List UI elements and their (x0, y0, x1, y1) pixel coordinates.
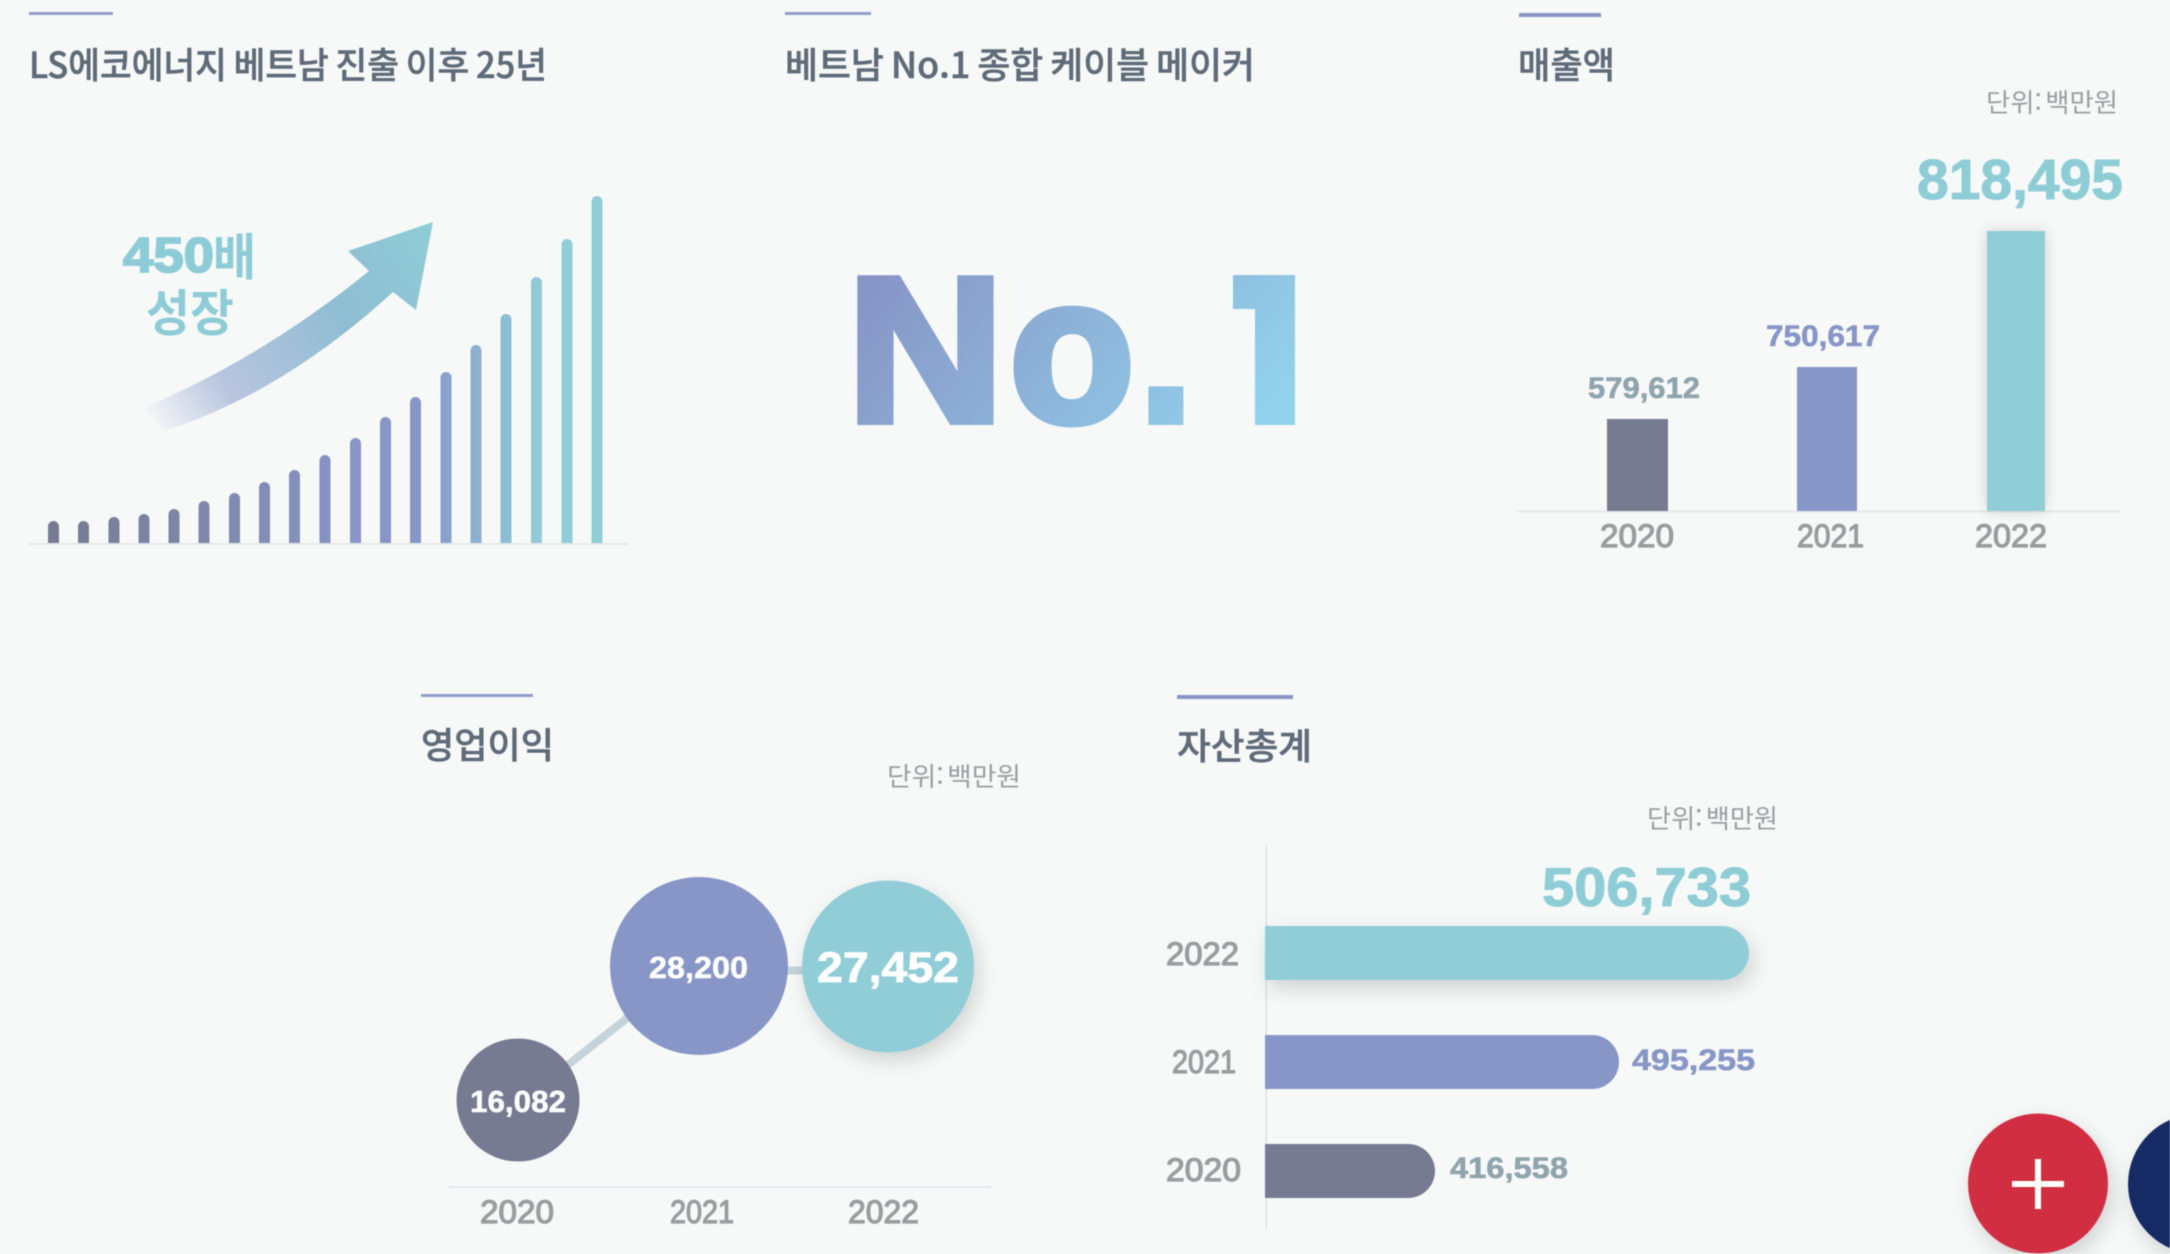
bubble chart: operating profit: 16,082 (470, 1084, 566, 1119)
bar chart: total assets: 2022 (1166, 936, 1239, 972)
bar chart: sales: 579,612 (1588, 372, 1700, 405)
panel: total assets (1166, 695, 1778, 1228)
bar chart: total assets: 495,255 (1632, 1044, 1755, 1077)
bar chart: total assets: 2020 (1166, 1152, 1241, 1188)
bar chart: growth bars (48, 196, 602, 555)
callout: 450x growth: 450 (123, 229, 214, 283)
unit label: 단위: 백만원 (1647, 799, 1778, 836)
unit label: 단위: 백만원 (1986, 83, 2118, 120)
big text: No. 1: o (1010, 235, 1134, 465)
bubble chart: operating profit: 2022 (848, 1194, 919, 1230)
bubble chart: operating profit (449, 877, 991, 1230)
bar chart: sales (1517, 148, 2123, 554)
big text: No. 1: 1 (1206, 235, 1321, 465)
panel: 25 years growth (29, 12, 629, 555)
big text: No. 1: . (1139, 235, 1193, 465)
callout: 450x growth (123, 218, 256, 346)
bubble chart: operating profit: 2021 (670, 1194, 734, 1230)
heading: growth: LS에코에너지 베트남 진출 이후 25년 (29, 37, 547, 89)
bubble chart: operating profit: 27,452 (817, 944, 959, 992)
bar chart: total assets: 506,733 (1542, 856, 1751, 918)
callout: 450x growth: 성장 (146, 274, 234, 346)
panel: operating profit (421, 694, 1021, 1230)
bar chart: sales: 750,617 (1766, 320, 1880, 353)
bar chart: sales: 2022 (1975, 518, 2047, 554)
arrow: growth (143, 222, 433, 431)
bar chart: sales: 818,495 (1917, 148, 2123, 212)
bar chart: sales: 2021 (1797, 518, 1864, 554)
bar chart: sales: 2020 (1600, 518, 1674, 554)
bar chart: total assets: 416,558 (1450, 1152, 1568, 1185)
unit label: 단위: 백만원 (887, 757, 1021, 794)
big text: No. 1: N (847, 235, 1004, 465)
heading: No.1: 베트남 No.1 종합 케이블 메이커 (785, 37, 1255, 89)
bubble chart: operating profit: 28,200 (649, 950, 748, 985)
heading: total assets: 자산총계 (1177, 718, 1312, 770)
panel: sales (1517, 13, 2123, 554)
callout: 450x growth: 배 (213, 218, 256, 290)
bubble chart: operating profit: 2020 (480, 1194, 554, 1230)
heading: sales: 매출액 (1518, 37, 1615, 89)
big text: No. 1 (856, 274, 1296, 428)
button: red plus (1968, 1114, 2108, 1254)
bar chart: total assets (1166, 845, 1755, 1228)
button: navy circle (2128, 1114, 2170, 1254)
bar chart: total assets: 2021 (1172, 1044, 1236, 1080)
panel: No.1 cable maker (784, 11, 1296, 428)
heading: operating profit: 영업이익 (421, 717, 554, 769)
